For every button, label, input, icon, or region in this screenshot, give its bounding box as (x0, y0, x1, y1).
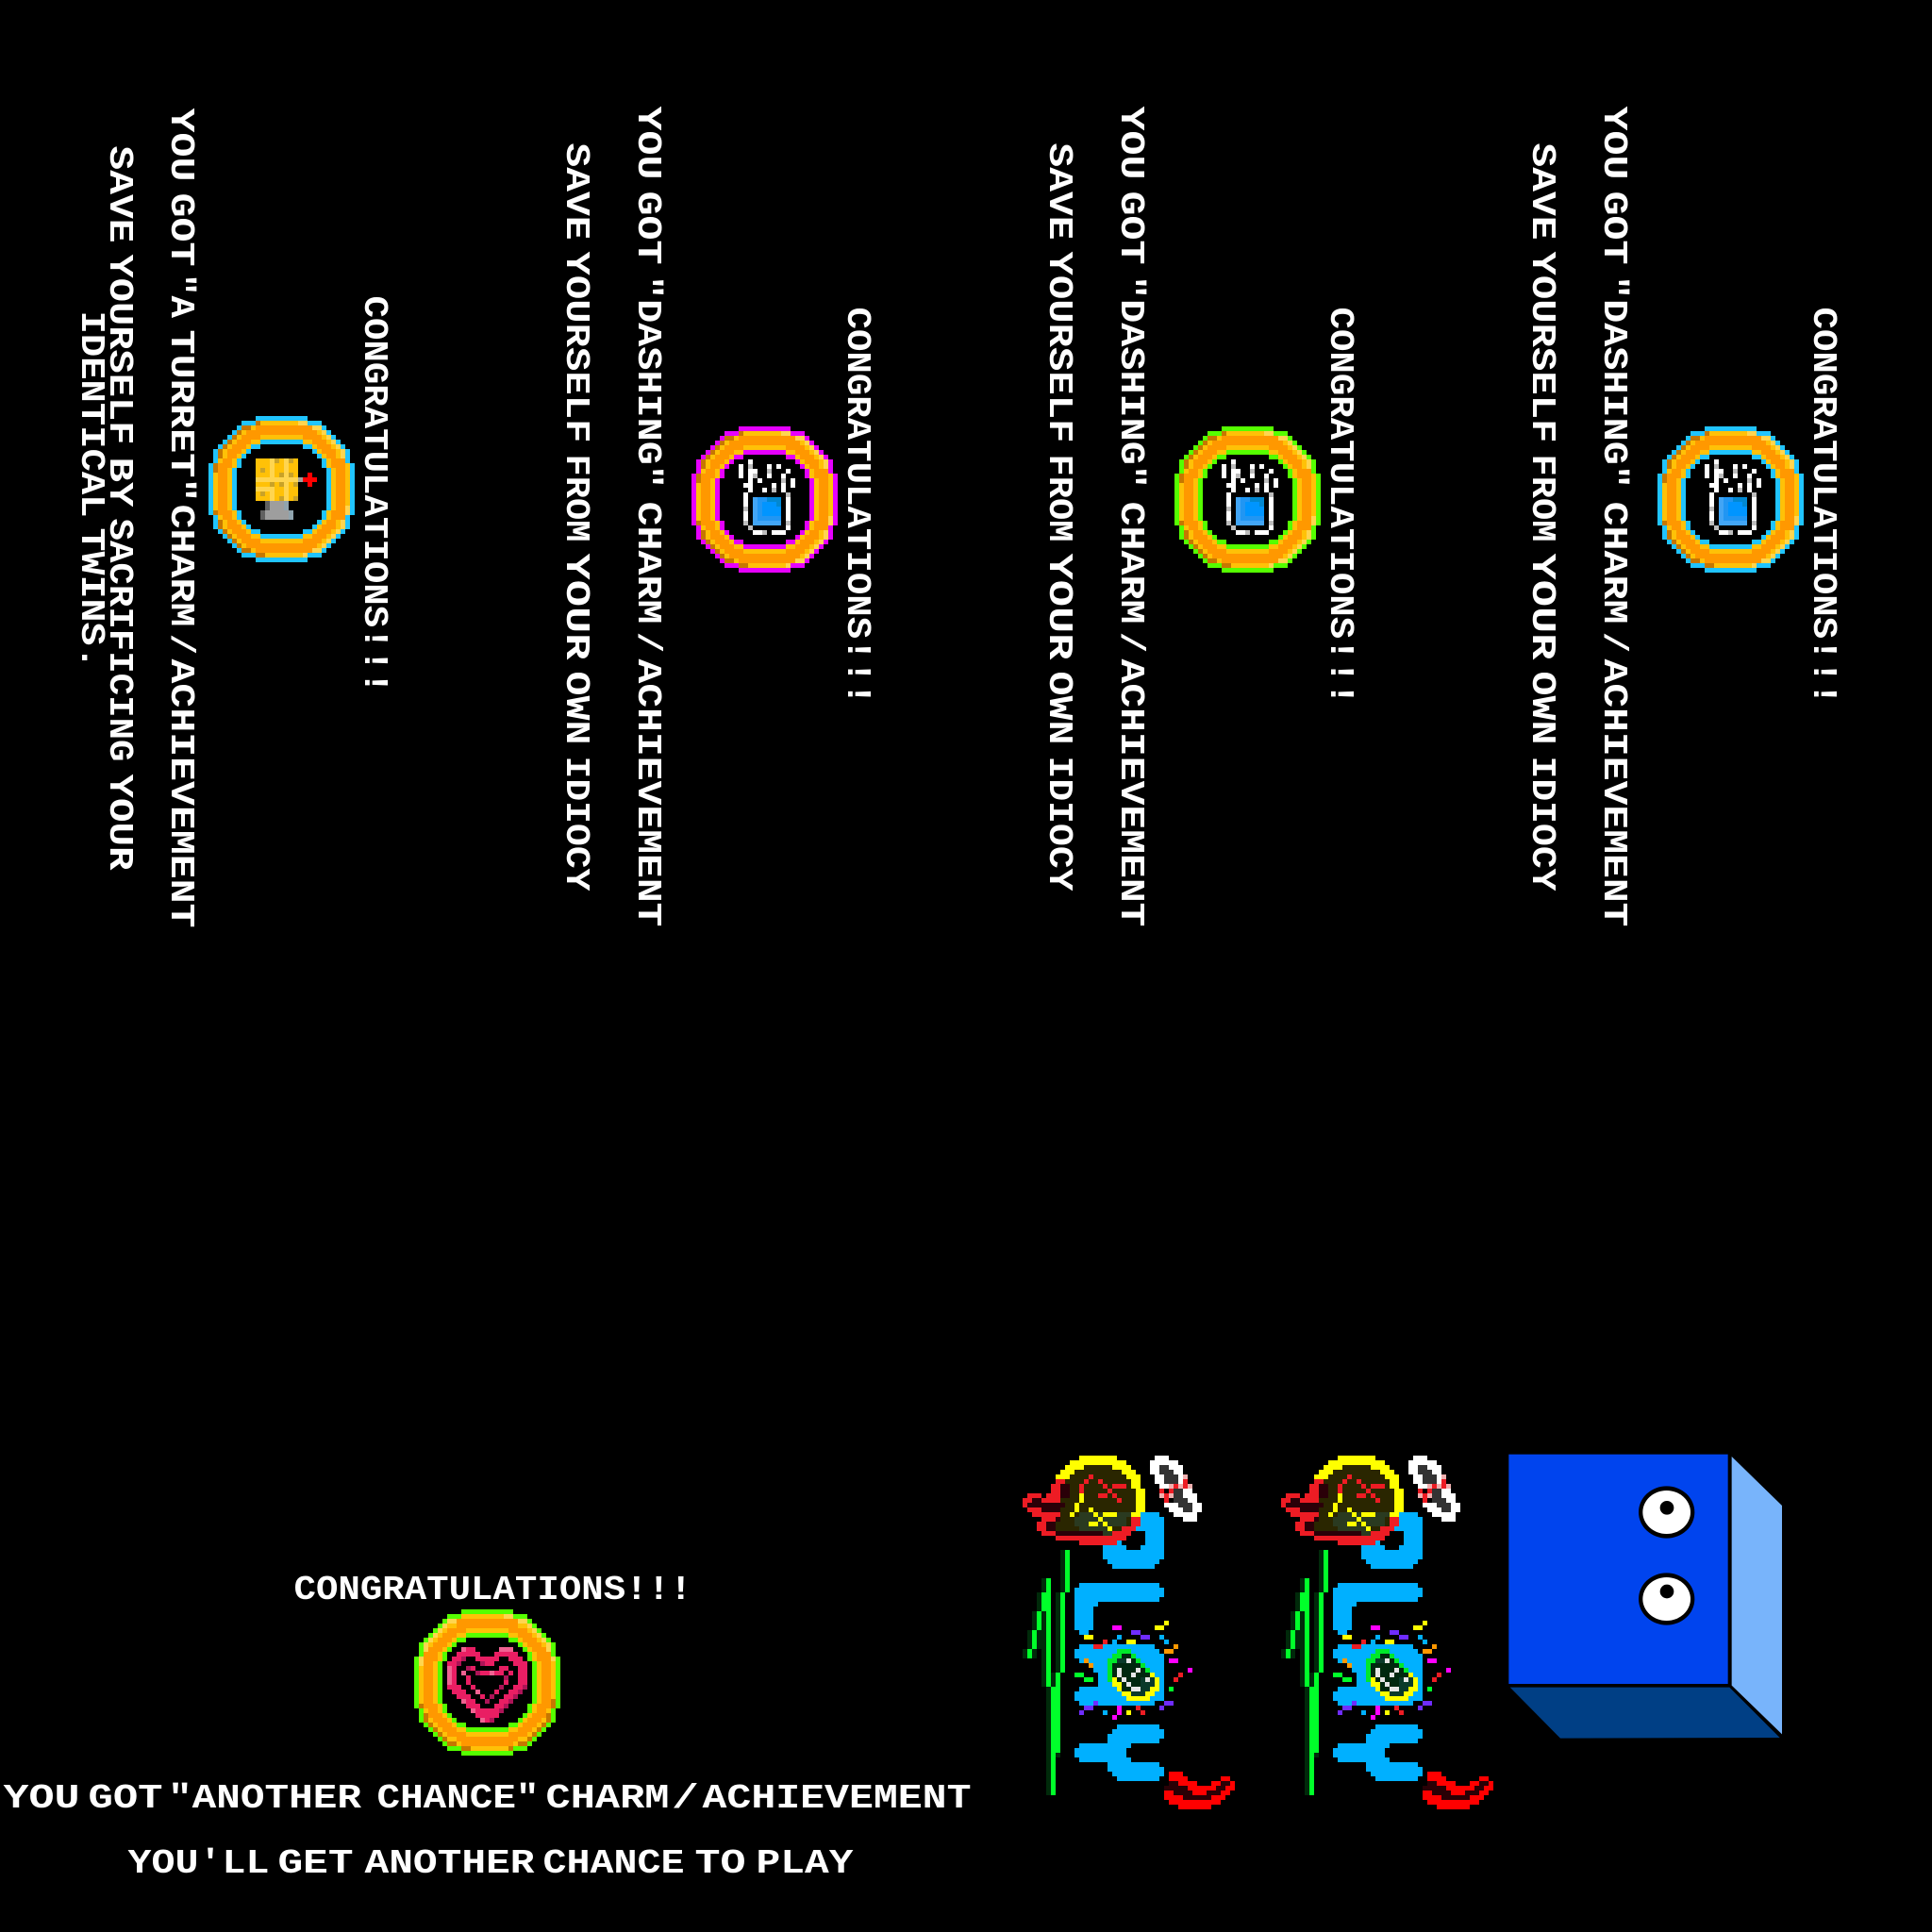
text: save yourself: YOUR (1523, 553, 1561, 660)
heading: congratulations: CONGRATULATIONS!!! (355, 296, 393, 694)
text: you got a turret: CHARM (161, 504, 200, 626)
text: you got dashing: ACHIEVEMENT (1111, 658, 1150, 926)
text: you got dashing: CHARM (1111, 502, 1150, 625)
panel: dashing charm, green ring (1040, 106, 1359, 926)
text: save yourself (1040, 143, 1078, 891)
icon: heart charm badge (414, 1609, 560, 1756)
text: another chance to play: YOU'LL (128, 1844, 270, 1883)
text: identical twins: IDENTICAL (72, 311, 110, 517)
panel: dashing charm, cyan ring (1523, 106, 1842, 926)
text: you got another chance: GOT (89, 1779, 162, 1818)
text: save yourself: YOUR (557, 553, 595, 660)
text: you got dashing: / (628, 632, 667, 653)
panel: turret charm (72, 108, 393, 928)
eye: lower (1639, 1573, 1694, 1625)
text: you got dashing: CHARM (628, 502, 667, 625)
heading: congratulations: CONGRATULATIONS!!! (838, 308, 876, 706)
text: save yourself: SAVE (557, 143, 595, 240)
text: you got dashing: ACHIEVEMENT (628, 658, 667, 926)
text: you got dashing: GOT (1111, 191, 1150, 264)
text: you got a turret: "A (161, 274, 200, 318)
heading: congratulations: CONGRATULATIONS!!! (1804, 308, 1842, 706)
text: you got a turret (161, 108, 200, 928)
text: you got dashing: "DASHING" (1111, 275, 1150, 489)
text: you got another chance: CHARM (545, 1779, 670, 1818)
text: you got dashing: GOT (628, 191, 667, 264)
text: save yourself: FROM (557, 455, 595, 541)
text: you got a turret: ACHIEVEMENT (161, 658, 200, 928)
text: save yourself: IDIOCY (557, 757, 595, 891)
text: you got another chance: / (672, 1779, 699, 1818)
text: save yourself by sacrificing: YOURSELF (100, 255, 139, 445)
text: save yourself: IDIOCY (1523, 757, 1561, 891)
text: you got dashing: "DASHING" (628, 275, 667, 489)
text: save yourself: OWN (1040, 672, 1078, 745)
text: you got another chance: ACHIEVEMENT (702, 1779, 972, 1818)
text: you got dashing: / (1594, 632, 1633, 653)
text: you got dashing: YOU (1111, 106, 1150, 179)
text: you got a turret: GOT (161, 192, 200, 266)
text: you got a turret: TURRET" (161, 330, 200, 502)
text: save yourself: IDIOCY (1040, 757, 1078, 891)
sprite: flower character one (1023, 1456, 1235, 1809)
text: you got another chance (4, 1779, 972, 1818)
text: identical twins: TWINS. (72, 528, 110, 670)
text: save yourself: FROM (1040, 455, 1078, 541)
text: save yourself by sacrificing: SACRIFICING (100, 519, 139, 762)
text: save yourself by sacrificing: SAVE (100, 145, 139, 243)
icon: dashing charm badge (1657, 426, 1804, 573)
text: another chance to play: TO (694, 1844, 745, 1883)
text: save yourself: SAVE (1523, 143, 1561, 240)
text: you got dashing (1594, 106, 1633, 926)
text: you got dashing (1111, 106, 1150, 926)
text: save yourself (1523, 143, 1561, 891)
text: you got another chance: "ANOTHER (168, 1779, 361, 1818)
text: save yourself: YOURSELF (557, 251, 595, 443)
text: save yourself: FROM (1523, 455, 1561, 541)
text: save yourself (557, 143, 595, 891)
text: another chance to play: GET (277, 1844, 353, 1883)
text: save yourself by sacrificing (100, 145, 139, 871)
text: save yourself: OWN (1523, 672, 1561, 745)
text: identical twins (72, 311, 110, 670)
text: you got dashing: / (1111, 632, 1150, 653)
text: another chance to play: ANOTHER (364, 1844, 535, 1883)
text: another chance to play: PLAY (757, 1844, 854, 1883)
text: save yourself: SAVE (1040, 143, 1078, 240)
icon: dashing charm badge (1174, 426, 1321, 573)
text: you got dashing: GOT (1594, 191, 1633, 264)
text: another chance to play: CHANCE (543, 1844, 685, 1883)
icon: blue cube with two eyes (1508, 1455, 1782, 1739)
panel: dashing charm, magenta ring (557, 106, 876, 926)
sprite: flower character two (1281, 1456, 1493, 1809)
text: you got a turret: / (161, 634, 200, 655)
panel: another chance charm (4, 1571, 972, 1883)
eye: upper (1639, 1486, 1694, 1539)
cube right face (1732, 1457, 1782, 1734)
text: you got dashing (628, 106, 667, 926)
text: you got another chance: CHANCE" (377, 1779, 540, 1818)
text: save yourself: OWN (557, 672, 595, 745)
text: save yourself: YOURSELF (1040, 251, 1078, 443)
text: you got a turret: YOU (161, 108, 200, 181)
text: you got dashing: YOU (1594, 106, 1633, 179)
cube front face (1508, 1455, 1728, 1684)
text: you got dashing: ACHIEVEMENT (1594, 658, 1633, 926)
text: save yourself by sacrificing: BY (100, 457, 139, 508)
text: you got another chance: YOU (4, 1779, 79, 1818)
heading: congratulations: CONGRATULATIONS!!! (294, 1571, 692, 1609)
text: save yourself by sacrificing: YOUR (100, 774, 139, 871)
text: you got dashing: CHARM (1594, 502, 1633, 625)
cube bottom face (1510, 1688, 1780, 1739)
icon: turret charm badge (208, 416, 355, 562)
text: you got dashing: YOU (628, 106, 667, 179)
text: save yourself: YOUR (1040, 553, 1078, 660)
icon: dashing charm badge (691, 426, 838, 573)
text: save yourself: YOURSELF (1523, 251, 1561, 443)
text: another chance to play (128, 1844, 854, 1883)
text: you got dashing: "DASHING" (1594, 275, 1633, 489)
heading: congratulations: CONGRATULATIONS!!! (1321, 308, 1359, 706)
